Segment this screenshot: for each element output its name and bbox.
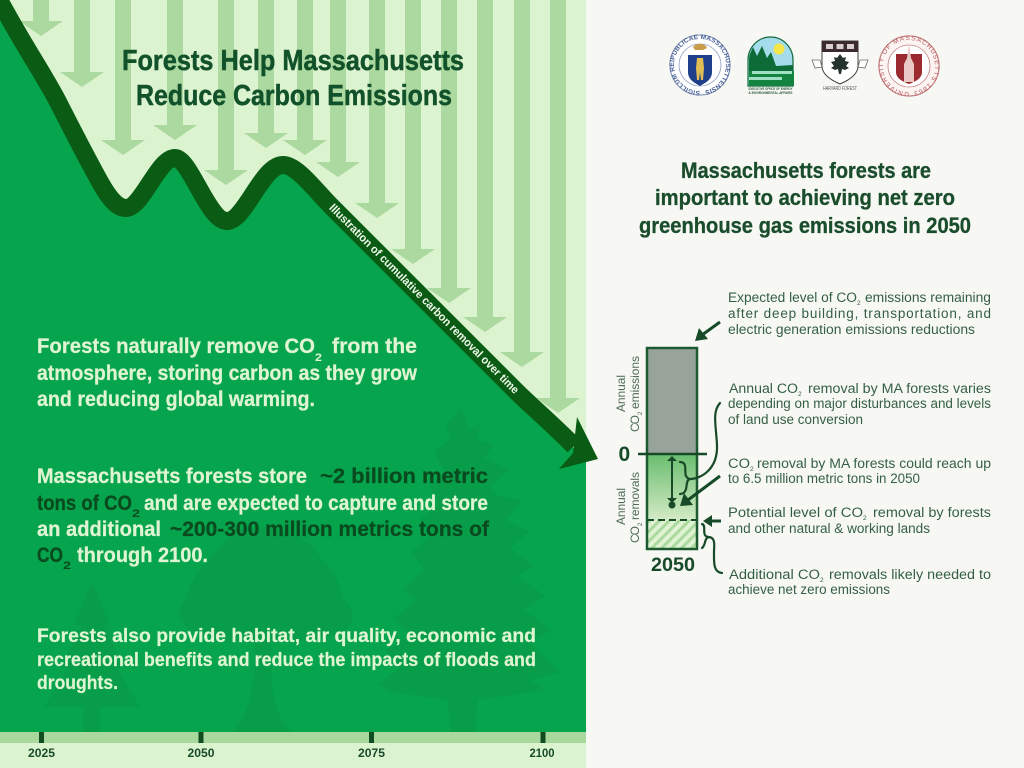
logo: Executive Office of Energy and Environmental Affairs: & ENVIRONMENTAL AFFAIRS xyxy=(748,91,793,95)
bar: annual CO2 emissions xyxy=(647,348,697,454)
text block: forests remove CO2: atmosphere, storing carbon as they grow xyxy=(37,362,418,385)
axis year labels xyxy=(28,746,555,760)
axis label: annual CO2 removals: Annual xyxy=(614,488,628,525)
text block: forests remove CO2: Forests naturally remove CO xyxy=(37,335,315,358)
arrow: potential level callout xyxy=(703,515,721,527)
annotation: forest removal variability xyxy=(728,381,991,427)
annotation: forest removal potential: removal by MA forests could reach up xyxy=(757,456,991,471)
right heading: important to achieving net zero xyxy=(655,185,955,210)
bar outline xyxy=(647,348,697,549)
annotation: potential level xyxy=(728,505,991,536)
dashed potential level line xyxy=(647,519,697,521)
annotation: forest removal variability: removal by MA forests varies xyxy=(808,381,991,396)
text block: Massachusetts carbon storage: tons of CO xyxy=(37,492,132,515)
annotation: potential level: 2 xyxy=(863,515,867,522)
text block: Massachusetts carbon storage: ~2 billion metric xyxy=(320,465,488,488)
text block: forests remove CO2 xyxy=(37,335,418,411)
axis label: annual CO2 removals: 2 xyxy=(638,522,644,526)
zero line xyxy=(638,453,707,455)
annotation: additional removals: 2 xyxy=(820,577,824,584)
text block: Massachusetts carbon storage: ~200-300 million metrics tons of xyxy=(170,518,490,541)
logo: Harvard Forest xyxy=(812,41,868,92)
text block: Massachusetts carbon storage: CO xyxy=(37,544,63,567)
annotation: forest removal variability: depending on major disturbances and levels xyxy=(728,396,991,411)
axis label: annual CO2 removals xyxy=(614,472,644,543)
annotation: expected emissions: Expected level of CO xyxy=(728,290,857,305)
annotation: potential level: removal by forests xyxy=(873,505,991,520)
annotation: forest removal potential: CO xyxy=(728,456,750,471)
logo: University of Massachusetts: UNIVERSITY OF MASSACHUSETTS 1863 xyxy=(878,36,940,96)
text block: additional forest benefits: Forests also provide habitat, air quality, economic and xyxy=(37,626,536,647)
axis year labels: 2050 xyxy=(188,746,215,760)
panel: left background xyxy=(0,0,586,768)
axis year labels: 2075 xyxy=(358,746,385,760)
text block: Massachusetts carbon storage xyxy=(37,465,490,572)
tree silhouettes xyxy=(44,407,560,732)
logo: Harvard Forest: HARVARD FOREST xyxy=(823,86,857,92)
annotation: additional removals: removals likely needed to xyxy=(829,567,991,582)
axis label: annual CO2 removals: removals xyxy=(628,472,642,520)
bar: additional removals hatched xyxy=(647,520,697,549)
text block: forests remove CO2: from the xyxy=(332,335,417,358)
arrow: reach callout xyxy=(680,476,720,506)
text block: Massachusetts carbon storage: 2 xyxy=(63,560,71,572)
text block: Massachusetts carbon storage: an additional xyxy=(37,518,161,541)
annotation: forest removal potential xyxy=(728,456,991,486)
annotation: expected emissions xyxy=(728,290,991,337)
title xyxy=(122,45,464,112)
axis year labels: 2025 xyxy=(28,746,55,760)
logo: Massachusetts state seal: SIGILLUM REIPUBLICAE MASSACHUSETTENSIS xyxy=(670,34,730,96)
axis label: annual CO2 emissions: emissions xyxy=(628,356,642,409)
right heading xyxy=(639,158,971,238)
downward carbon removal arrows xyxy=(19,0,580,413)
text block: forests remove CO2: 2 xyxy=(315,352,322,364)
text block: Massachusetts carbon storage: through 2100. xyxy=(77,544,208,567)
text block: Massachusetts carbon storage: 2 xyxy=(132,508,140,520)
zero label: 0 xyxy=(618,443,630,466)
time axis xyxy=(0,732,586,760)
brace: forest removal variability xyxy=(680,403,720,494)
text block: Massachusetts carbon storage: and are expected to capture and store xyxy=(144,492,488,515)
text block: Massachusetts carbon storage: Massachusetts forests store xyxy=(37,465,307,488)
logo: Executive Office of Energy and Environmental Affairs xyxy=(748,37,794,95)
right heading: Massachusetts forests are xyxy=(681,158,931,183)
axis ticks xyxy=(42,732,543,743)
annotation: expected emissions: after deep building, transportation, and xyxy=(728,306,991,321)
green area under carbon curve xyxy=(0,5,586,732)
annotation: additional removals: achieve net zero emissions xyxy=(728,582,890,597)
logo: Executive Office of Energy and Environmental Affairs: EXECUTIVE OFFICE OF ENERGY xyxy=(748,87,793,91)
right heading: greenhouse gas emissions in 2050 xyxy=(639,213,971,238)
annotation: forest removal potential: to 6.5 million metric tons in 2050 xyxy=(728,471,920,486)
text block: additional forest benefits xyxy=(37,626,536,694)
brace: additional removals xyxy=(702,524,722,573)
double arrow: forest removal range xyxy=(667,456,677,508)
title: Forests Help Massachusetts xyxy=(122,45,464,77)
axis label: annual CO2 emissions: Annual xyxy=(614,375,628,412)
arrow: cumulative carbon removal curve xyxy=(0,0,598,469)
axis band xyxy=(0,732,586,743)
annotation: potential level: and other natural & working lands xyxy=(728,521,930,536)
bar: forest removals xyxy=(647,454,697,520)
annotation: forest removal variability: of land use conversion xyxy=(728,412,863,427)
curve label: Illustration of cumulative carbon removal over time xyxy=(326,202,521,397)
bar chart: 2050 emissions and removals xyxy=(618,348,707,576)
arrow: expected emissions callout xyxy=(695,322,720,341)
text block: additional forest benefits: droughts. xyxy=(37,673,118,694)
annotation: additional removals xyxy=(728,567,991,597)
annotation: additional removals: Additional CO xyxy=(729,567,820,582)
axis label: annual CO2 emissions: CO xyxy=(628,415,642,432)
text block: additional forest benefits: recreational benefits and reduce the impacts of floods and xyxy=(37,650,536,671)
axis label: annual CO2 emissions: 2 xyxy=(638,411,644,415)
annotation: potential level: Potential level of CO xyxy=(728,505,863,520)
annotation: expected emissions: electric generation emissions reductions xyxy=(728,322,975,337)
axis label: annual CO2 removals: CO xyxy=(628,526,642,543)
axis label: annual CO2 emissions xyxy=(614,356,644,432)
year label: 2050 xyxy=(651,555,695,576)
annotation: expected emissions: 2 xyxy=(857,300,861,307)
axis year labels: 2100 xyxy=(530,746,555,760)
annotation: forest removal variability: 2 xyxy=(798,391,802,398)
title: Reduce Carbon Emissions xyxy=(136,80,452,112)
text block: forests remove CO2: and reducing global warming. xyxy=(37,388,315,411)
annotation: forest removal variability: Annual CO xyxy=(729,381,798,396)
annotation: expected emissions: emissions remaining xyxy=(865,290,991,305)
annotation: forest removal potential: 2 xyxy=(750,466,754,473)
